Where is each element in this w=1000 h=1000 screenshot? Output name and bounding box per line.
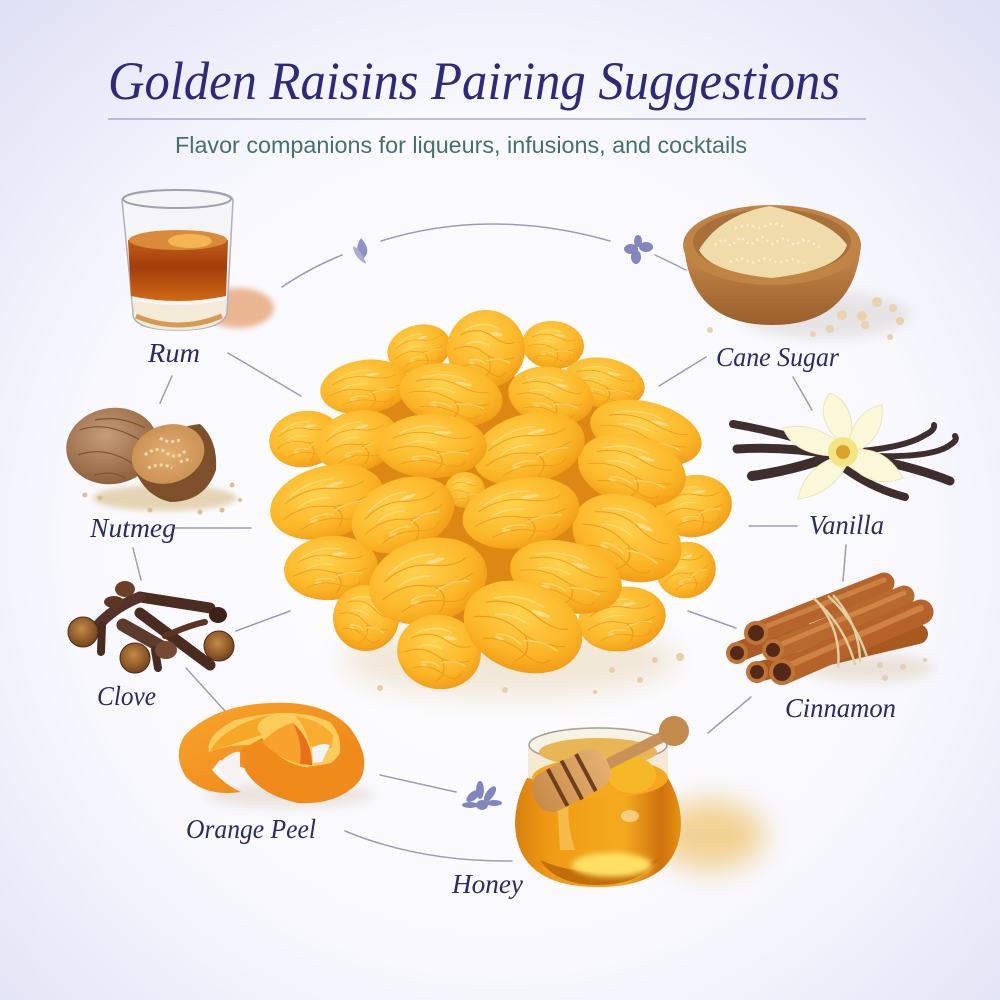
labels [89,338,896,899]
icon: vanilla flower and pods [733,393,956,499]
label: orange peel: Orange Peel [186,814,316,844]
icon: honey jar [515,716,765,887]
icon: flower ornament bottom [462,781,502,810]
icon: cinnamon sticks [728,580,935,683]
icon: rum glass [122,190,274,330]
label: honey: Honey [451,869,523,899]
icon: leaf ornament [353,238,367,264]
icon: nutmeg [60,401,242,514]
connector lines [133,224,846,861]
central raisin pile [262,304,737,698]
subtitle: Flavor companions for liqueurs, infusions, and cocktails [175,132,747,158]
label: cane sugar: Cane Sugar [716,342,839,372]
icon: cloves [68,581,234,673]
icon: flower ornament left [624,235,653,264]
label: rum: Rum [147,338,200,368]
label: nutmeg: Nutmeg [89,513,176,543]
icon: bowl of cane sugar [683,205,910,340]
icon: orange peel [179,703,375,807]
title: Golden Raisins Pairing Suggestions [108,51,840,111]
label: cinnamon: Cinnamon [785,693,896,723]
label: clove: Clove [97,681,156,711]
label: vanilla: Vanilla [809,510,884,540]
